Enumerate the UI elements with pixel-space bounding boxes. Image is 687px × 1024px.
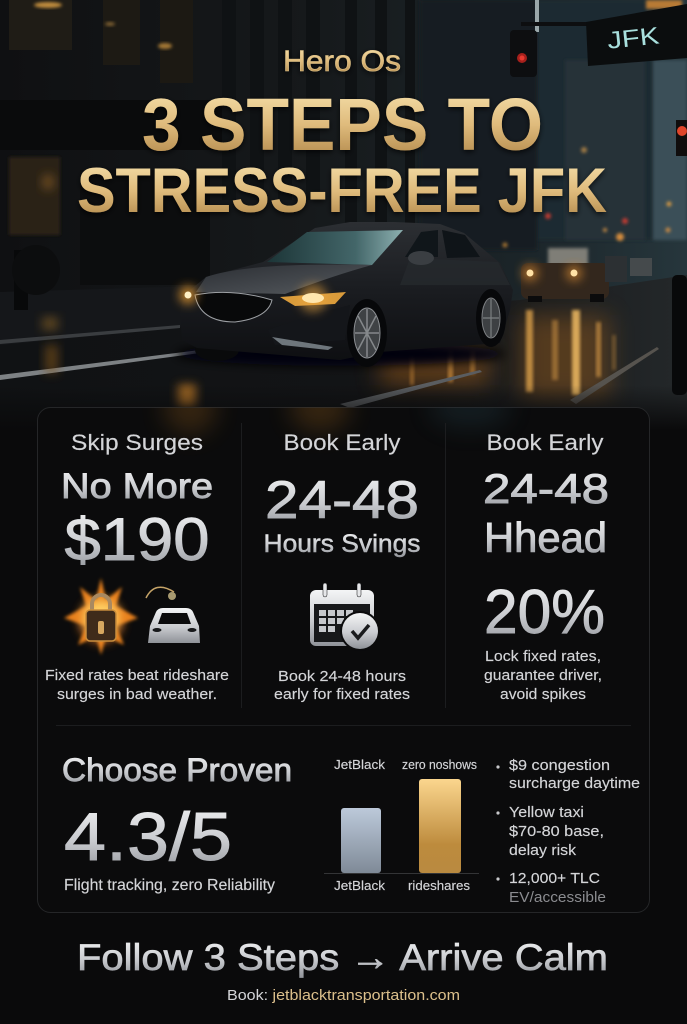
second car with headlights <box>521 248 652 302</box>
icon: lock in explosion <box>64 578 138 655</box>
step 2 heading: Book Early <box>284 430 400 455</box>
step 2 description: Book 24-48 hours <box>278 668 406 685</box>
stat: $190: $190 <box>64 506 210 573</box>
bullet list: surcharge daytime <box>509 775 640 792</box>
bar: JetBlack <box>341 808 381 873</box>
street sign: JFK <box>586 4 687 66</box>
centre building facade <box>222 0 415 230</box>
stat: No More: No More <box>61 467 213 506</box>
step 3 description: Lock fixed rates, <box>485 648 601 665</box>
step 2 description <box>274 668 410 703</box>
car wheels <box>347 289 506 367</box>
hero fade to black <box>0 385 687 430</box>
title <box>77 83 607 226</box>
axis label: JetBlack: JetBlack <box>334 878 386 893</box>
sidewalk <box>0 285 230 345</box>
bullet list: EV/accessible <box>509 889 606 906</box>
step 1: Skip Surges <box>45 430 229 703</box>
call to action: Follow 3 Steps → Arrive Calm <box>77 937 608 978</box>
step 3 heading: Book Early <box>486 430 604 455</box>
bullet list: delay risk <box>509 842 577 859</box>
right edge dark object <box>672 275 687 395</box>
title: 3 STEPS TO <box>142 83 543 166</box>
black sedan <box>175 222 513 367</box>
bullet list: $9 congestion <box>509 757 610 774</box>
section: Choose Proven <box>62 752 292 894</box>
step 1 heading: Skip Surges <box>71 430 203 455</box>
step 2: Book Early <box>264 430 420 703</box>
step 3 description: avoid spikes <box>500 686 586 703</box>
road <box>0 275 687 430</box>
bar label: zero noshows: zero noshows <box>402 758 477 772</box>
step 1 description <box>45 667 229 703</box>
bar chart <box>324 757 479 893</box>
road stripe <box>0 350 200 380</box>
step 3 description <box>484 648 602 703</box>
traffic signal <box>510 0 687 156</box>
bar label: JetBlack: JetBlack <box>334 757 386 772</box>
caption: Flight tracking, zero Reliability <box>64 877 275 894</box>
icon: car with swoosh <box>146 587 200 643</box>
stat: Hours Svings: Hours Svings <box>264 530 420 558</box>
stat: 24-48: 24-48 <box>265 471 419 530</box>
street lights bokeh <box>502 147 672 248</box>
stat: 4.3/5: 4.3/5 <box>64 799 232 875</box>
curb line <box>0 325 180 344</box>
road reflections <box>42 310 659 408</box>
bullet list: Yellow taxi <box>509 804 584 821</box>
right towers <box>420 0 687 250</box>
icon: calendar with check <box>310 583 380 651</box>
title: STRESS-FREE JFK <box>77 156 607 226</box>
bullet list: $70-80 base, <box>509 823 604 840</box>
heading: Choose Proven: Choose Proven <box>62 752 292 788</box>
hero photo: rainy city street <box>0 0 687 430</box>
step 3: Book Early <box>483 430 609 703</box>
stat: 20%: 20% <box>484 578 605 647</box>
bullet list: 12,000+ TLC <box>509 870 600 887</box>
step 1 description: Fixed rates beat rideshare <box>45 667 229 684</box>
pedestrian with bicycle <box>12 245 60 310</box>
bar: rideshares <box>419 779 461 873</box>
step 3 description: guarantee driver, <box>484 667 602 684</box>
bullet list <box>496 757 640 906</box>
step 2 description: early for fixed rates <box>274 686 410 703</box>
panel: steps card <box>38 382 650 912</box>
eyebrow: Hero Os: Hero Os <box>283 45 401 78</box>
street sign: JFK: JFK <box>606 22 660 55</box>
axis label: rideshares: rideshares <box>408 878 471 893</box>
stat: Hhead: Hhead <box>484 514 607 561</box>
stat: 24-48: 24-48 <box>483 465 609 512</box>
booking link: Book: jetblacktransportation.com <box>227 988 460 1004</box>
left building windows <box>0 0 230 285</box>
step 1 description: surges in bad weather. <box>57 686 217 703</box>
